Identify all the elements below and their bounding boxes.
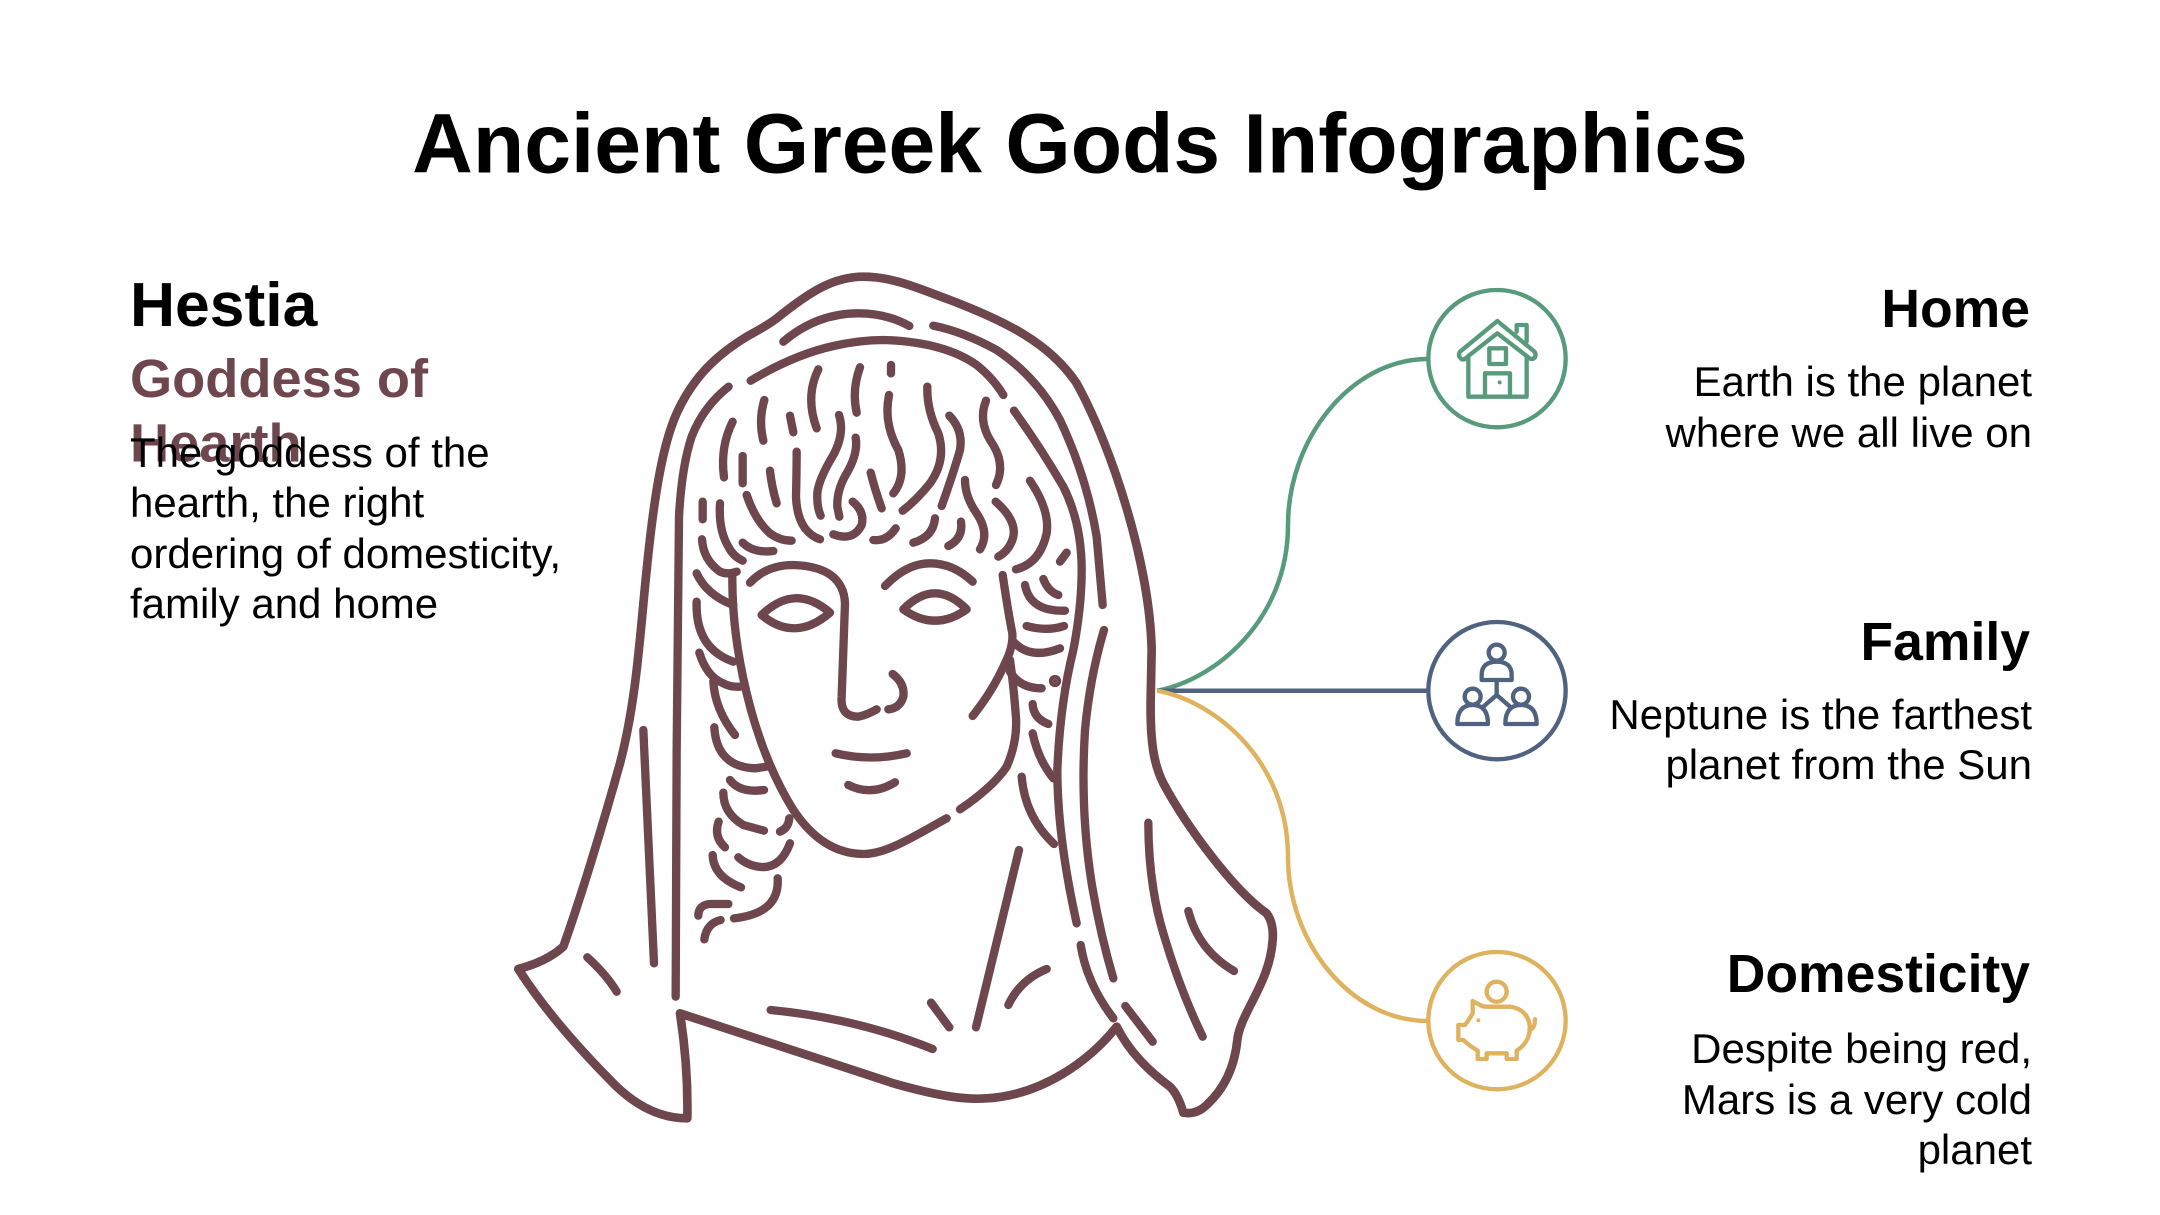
right brow: [885, 563, 973, 586]
text block: Hestia body: The goddess of the: [130, 429, 490, 476]
text block: Home: where we all live on: [1664, 409, 2032, 456]
text block: Home: [1664, 280, 2032, 456]
text block: Domesticity: Despite being red,: [1691, 1025, 2032, 1072]
text block: Family: [1609, 613, 2032, 788]
lower right hair and drape folds: [931, 672, 1234, 1042]
panel: Hestia description: [130, 271, 561, 627]
connector: green curve to Home: [1157, 359, 1428, 691]
text block: Domesticity: [1682, 945, 2032, 1173]
text block: Family: Neptune is the farthest: [1609, 691, 2032, 738]
hair and face, upper left: [676, 313, 1003, 997]
subheading: Goddess of Hearth: Hearth: [130, 414, 302, 474]
text block: Hestia body: family and home: [130, 580, 438, 627]
text block: Family: planet from the Sun: [1665, 741, 2032, 788]
text block: Hestia body: hearth, the right: [130, 479, 425, 526]
veil outer outline: [518, 277, 1273, 1118]
icon: family circle: [1428, 622, 1566, 759]
subheading: Goddess of Hearth: Goddess of: [130, 349, 429, 409]
nose wing: [888, 674, 904, 709]
connector: slate line to Family: [1157, 688, 1428, 693]
right eye: [903, 593, 967, 621]
text block: Domesticity: Domesticity: [1727, 945, 2030, 1004]
text block: Home: Earth is the planet: [1693, 358, 2032, 405]
hair and veil, upper right: [887, 326, 1113, 978]
left brow and nose: [750, 565, 877, 717]
left eye: [762, 598, 830, 628]
text block: Family: Family: [1860, 613, 2030, 672]
text block: Domesticity: planet: [1918, 1126, 2032, 1173]
illustration: Hestia bust: [518, 277, 1273, 1118]
text block: Domesticity: Mars is a very cold: [1682, 1076, 2032, 1123]
icon: piggy bank circle: [1428, 952, 1566, 1089]
text block: Home: Home: [1881, 280, 2030, 339]
title: Ancient Greek Gods Infographics: [412, 96, 1748, 190]
icon: home circle: [1428, 290, 1566, 427]
heading: Hestia: Hestia: [130, 271, 319, 340]
connector: gold curve to Domesticity: [1157, 691, 1428, 1021]
lower left hair, neck and drape: [587, 682, 933, 1049]
text block: Hestia body: ordering of domesticity,: [130, 530, 561, 577]
